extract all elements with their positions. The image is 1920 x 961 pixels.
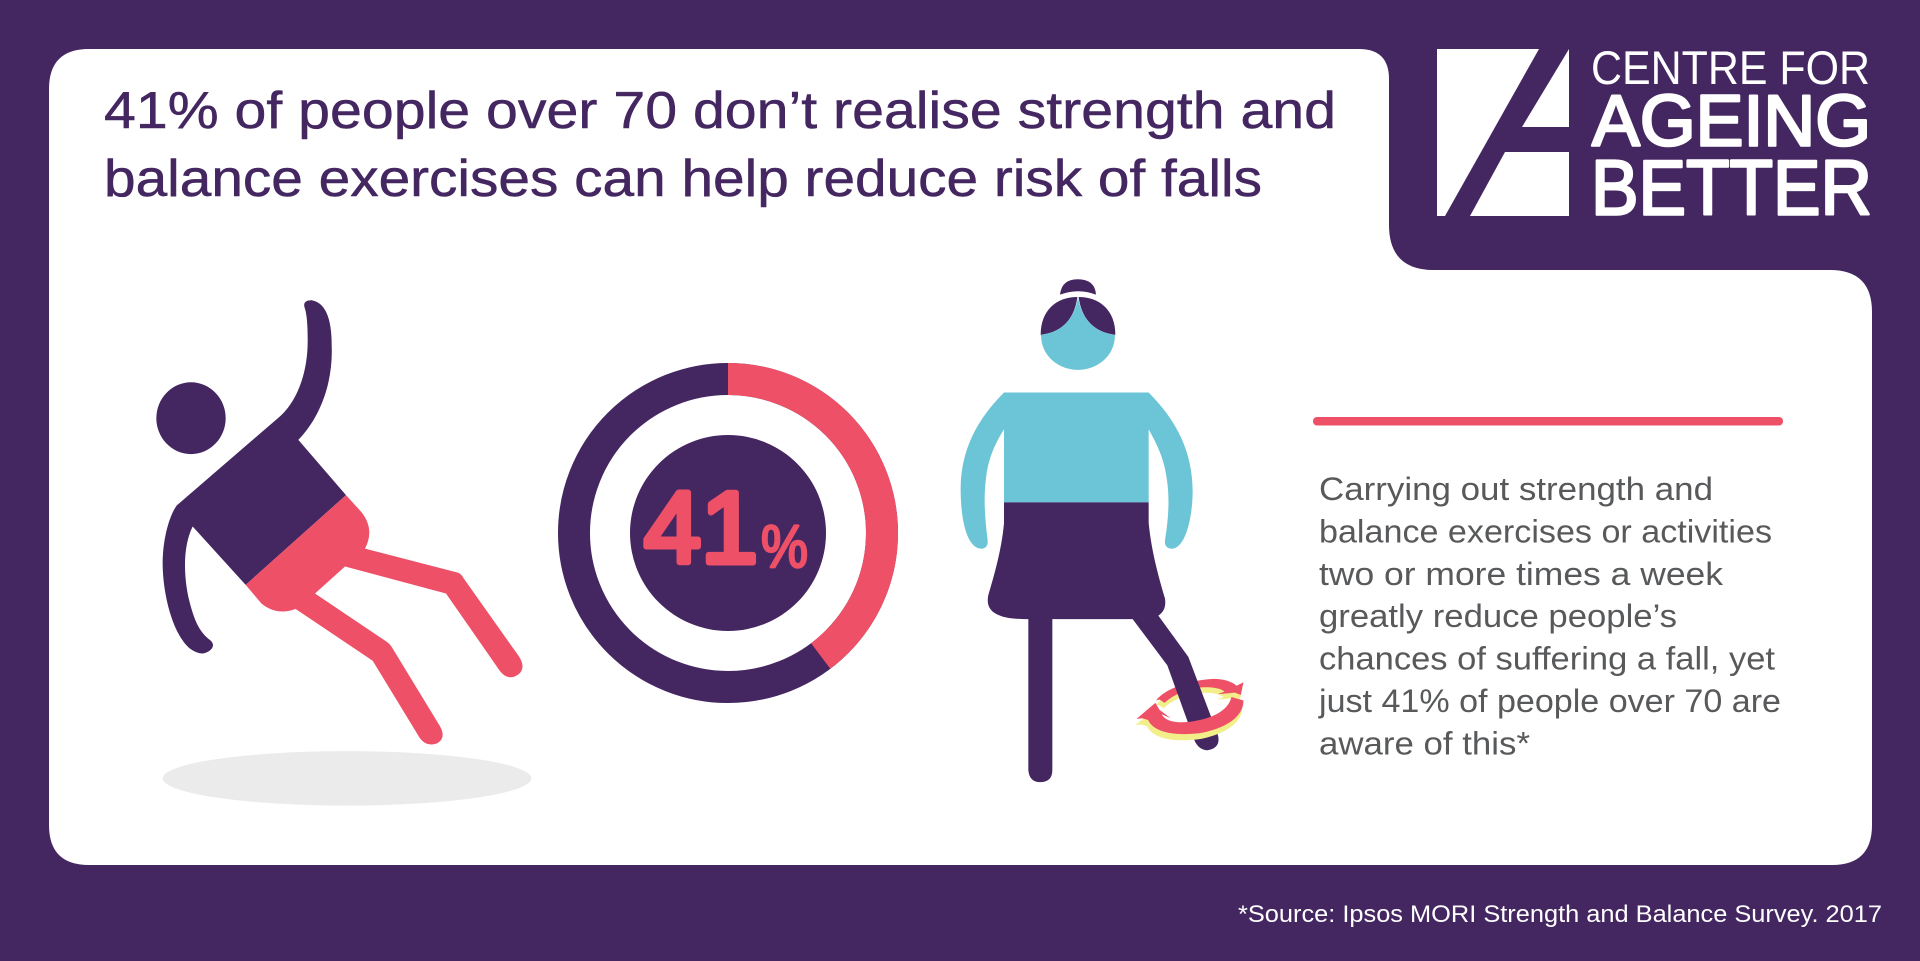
logo: Centre for Ageing Better (1437, 41, 1872, 232)
rotation arrow, front half (1135, 697, 1243, 740)
donut chart: 41% (574, 379, 882, 687)
body text: aware of this* (1319, 725, 1530, 761)
woman face (1041, 297, 1115, 370)
rotation arrow, back half (1155, 679, 1243, 708)
donut value: 41 (644, 472, 758, 584)
falling person head (156, 382, 226, 454)
donut value: % (761, 513, 808, 580)
donut ring 41% segment (728, 379, 882, 656)
body text: two or more times a week (1319, 556, 1724, 592)
icon: falling person (156, 300, 531, 806)
body text: chances of suffering a fall, yet (1319, 641, 1775, 677)
woman hair (1041, 279, 1115, 335)
logo mark (1437, 49, 1569, 216)
donut centre disc (630, 435, 826, 631)
woman skirt and legs (988, 502, 1219, 782)
logo wordmark (1591, 41, 1872, 232)
donut value (644, 472, 808, 584)
woman top and arms (961, 392, 1193, 549)
body text: balance exercises or activities (1319, 513, 1772, 549)
title (104, 82, 1336, 208)
body text: greatly reduce people’s (1319, 598, 1677, 634)
body text (1318, 471, 1781, 761)
falling person shorts and legs (246, 495, 522, 745)
falling person shadow (163, 751, 531, 806)
source note: *Source: Ipsos MORI Strength and Balance Survey. 2017 (1238, 901, 1882, 928)
logo wordmark: CENTRE FOR (1591, 41, 1870, 94)
logo wordmark: BETTER (1591, 144, 1872, 232)
divider line (1313, 417, 1783, 426)
title: 41% of people over 70 don’t realise strength and (104, 82, 1336, 140)
falling person torso and arms (163, 300, 346, 653)
logo wordmark: AGEING (1592, 82, 1871, 162)
body text: Carrying out strength and (1319, 471, 1713, 507)
title: balance exercises can help reduce risk of falls (104, 150, 1262, 208)
icon: balancing woman (961, 279, 1243, 782)
woman figure (961, 279, 1219, 782)
body text: just 41% of people over 70 are (1318, 683, 1781, 719)
donut ring remainder (574, 379, 882, 687)
